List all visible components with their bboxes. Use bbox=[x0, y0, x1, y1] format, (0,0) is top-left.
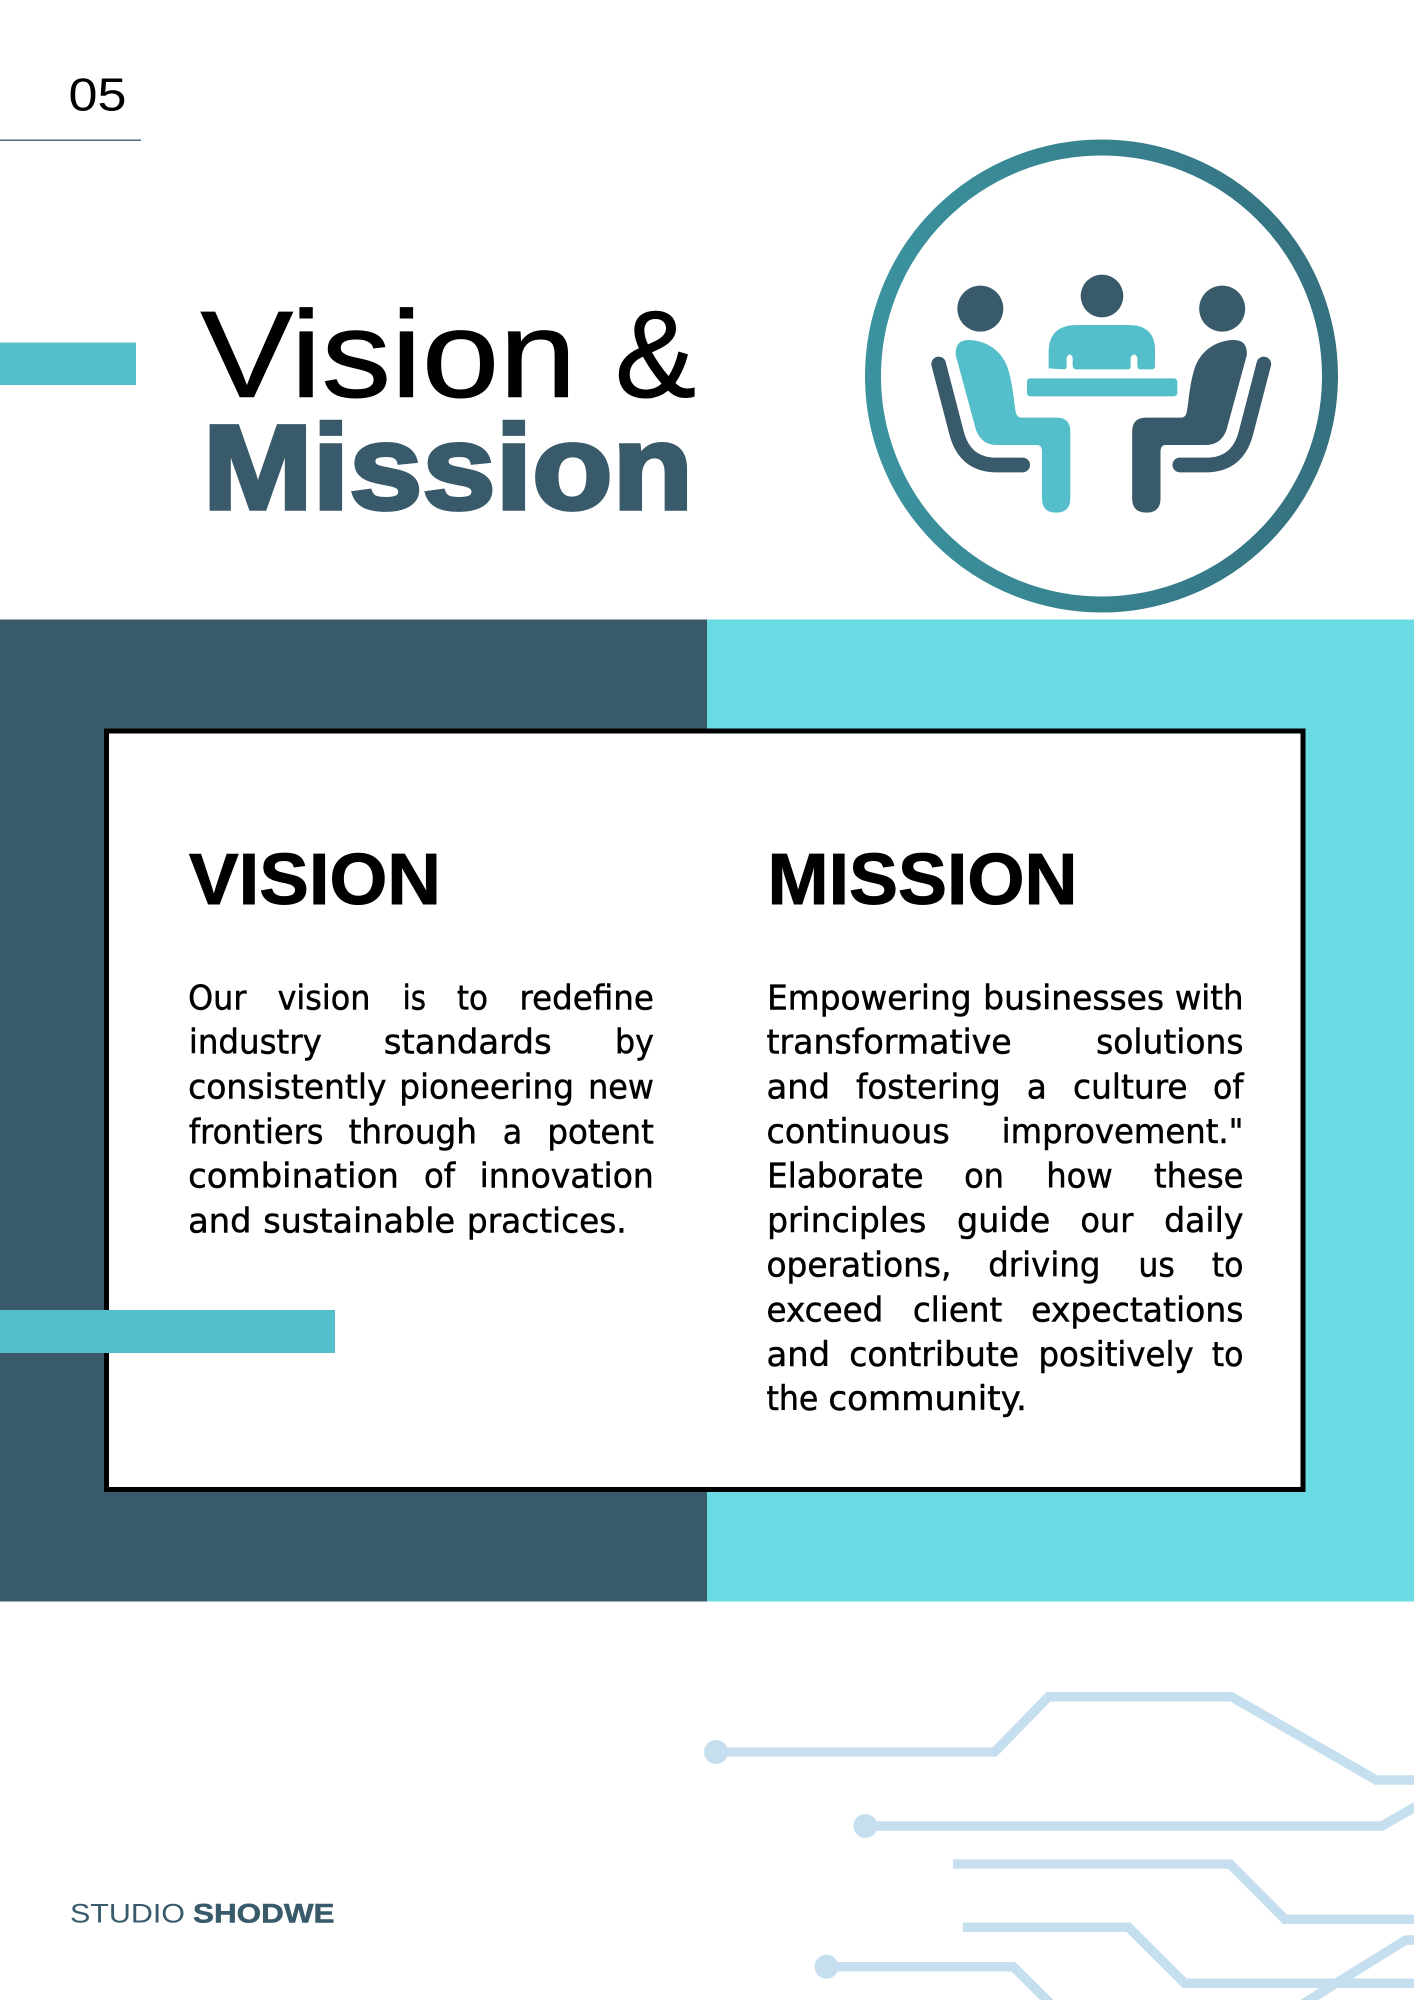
text: vision body: sustainable bbox=[263, 1202, 455, 1241]
text: mission body: a bbox=[1027, 1068, 1047, 1107]
accent bar: title bbox=[0, 342, 136, 385]
text: mission body: client bbox=[913, 1291, 1002, 1330]
text: vision body: practices. bbox=[467, 1202, 627, 1241]
panel: vision and mission card bbox=[106, 731, 1303, 1490]
text: mission body: continuous bbox=[767, 1112, 950, 1152]
text: vision body: combination bbox=[188, 1157, 399, 1196]
person: left bbox=[939, 286, 1070, 513]
text: mission body: with bbox=[1175, 979, 1243, 1018]
text: mission body: principles bbox=[767, 1201, 926, 1241]
decoration: circuit lines bbox=[704, 1697, 1414, 2000]
text: vision body: and bbox=[188, 1202, 251, 1241]
text: mission body: positively bbox=[1038, 1335, 1194, 1375]
text: mission body: fostering bbox=[856, 1068, 1001, 1107]
text: mission body: to bbox=[1212, 1335, 1243, 1375]
text: vision body: of bbox=[424, 1157, 456, 1196]
title line: Mission: Mission bbox=[203, 401, 693, 535]
text: vision body: industry bbox=[189, 1023, 322, 1062]
text: vision body: frontiers bbox=[189, 1113, 324, 1152]
text: mission body: expectations bbox=[1031, 1291, 1243, 1330]
text: mission body: of bbox=[1213, 1068, 1244, 1107]
title line: Vision &: & bbox=[615, 287, 696, 424]
text: vision body: pioneering bbox=[399, 1068, 574, 1107]
text: mission body: solutions bbox=[1096, 1023, 1243, 1062]
text: vision body: is bbox=[403, 979, 426, 1018]
footer brand: SHODWE bbox=[193, 1898, 334, 1928]
text: vision body: new bbox=[588, 1068, 654, 1107]
text: vision body bbox=[188, 979, 654, 1241]
text: vision body: to bbox=[457, 979, 488, 1018]
text: mission body: daily bbox=[1164, 1201, 1243, 1241]
text: vision body: vision bbox=[278, 979, 370, 1018]
text: mission body bbox=[767, 979, 1244, 1419]
footer brand: STUDIO bbox=[70, 1898, 185, 1928]
text: mission body: transformative bbox=[767, 1023, 1012, 1062]
heading: mission: MISSION bbox=[768, 840, 1078, 920]
text: mission body: contribute bbox=[849, 1335, 1019, 1375]
text: mission body: Elaborate bbox=[767, 1157, 924, 1196]
text: vision body: redefine bbox=[519, 979, 654, 1018]
text: mission body: guide bbox=[957, 1201, 1050, 1241]
page number: 05 bbox=[68, 69, 126, 121]
accent bar: card bbox=[0, 1310, 335, 1353]
text: mission body: operations, bbox=[767, 1246, 951, 1285]
table bbox=[1027, 378, 1177, 396]
text: vision body: Our bbox=[188, 979, 247, 1018]
text: vision body: potent bbox=[547, 1113, 654, 1152]
text: mission body: and bbox=[767, 1068, 830, 1107]
text: mission body: exceed bbox=[767, 1291, 883, 1330]
text: vision body: consistently bbox=[188, 1068, 387, 1107]
text: mission body: how bbox=[1046, 1157, 1113, 1196]
text: vision body: a bbox=[503, 1113, 522, 1152]
text: mission body: and bbox=[767, 1335, 830, 1375]
text: mission body: on bbox=[964, 1157, 1004, 1196]
text: mission body: these bbox=[1154, 1157, 1243, 1196]
heading: vision: VISION bbox=[189, 840, 441, 920]
text: mission body: businesses bbox=[983, 979, 1164, 1018]
panel: mission bbox=[767, 840, 1244, 1419]
text: vision body: standards bbox=[384, 1023, 552, 1062]
text: mission body: driving bbox=[988, 1246, 1100, 1285]
text: mission body: Empowering bbox=[767, 979, 972, 1018]
background band: dark bbox=[0, 620, 707, 1602]
panel: vision bbox=[188, 840, 654, 1241]
text: mission body: our bbox=[1080, 1201, 1134, 1241]
text: mission body: us bbox=[1138, 1246, 1175, 1285]
text: mission body: to bbox=[1212, 1246, 1243, 1285]
background band: light bbox=[707, 620, 1414, 1602]
title line: Vision &: Vision bbox=[200, 287, 576, 424]
person: centre bbox=[1049, 275, 1155, 369]
text: vision body: by bbox=[615, 1023, 654, 1062]
icon: meeting in circle bbox=[873, 148, 1330, 604]
text: mission body: community. bbox=[828, 1379, 1027, 1419]
text: vision body: innovation bbox=[480, 1157, 654, 1196]
text: vision body: through bbox=[349, 1113, 477, 1152]
person: right bbox=[1132, 286, 1264, 513]
text: mission body: the bbox=[767, 1379, 818, 1419]
text: mission body: improvement." bbox=[1002, 1112, 1243, 1152]
text: mission body: culture bbox=[1073, 1068, 1188, 1107]
title bbox=[200, 287, 696, 535]
